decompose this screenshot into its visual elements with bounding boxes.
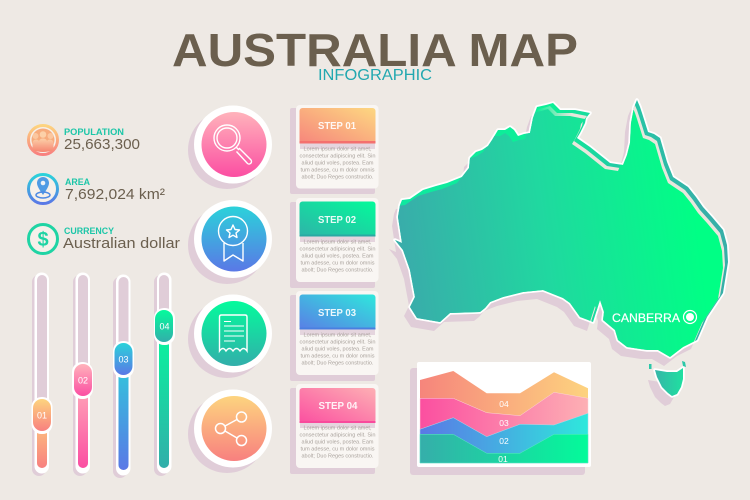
body text: Lorem ipsum dolor sit amet,: [304, 146, 372, 152]
body text: consectetur adipiscing elit. Sin: [300, 340, 376, 346]
step heading: STEP 01: [318, 121, 356, 132]
card: step 01: [290, 105, 378, 194]
body text: abolt; Duo Reges constructio.: [302, 360, 374, 366]
map of Australia: [389, 100, 728, 406]
series labels: 01: [498, 454, 508, 464]
slider value: 02: [78, 376, 88, 386]
title: AUSTRALIA MAP: [172, 24, 578, 76]
card: step 03: [290, 291, 378, 381]
slider 02: [72, 272, 93, 476]
body text: abolt; Duo Reges constructio.: [302, 454, 374, 460]
series labels: [498, 399, 509, 464]
series labels: 03: [499, 418, 509, 428]
icon: dollar: [28, 224, 58, 254]
card: step 02: [290, 198, 378, 288]
series 04: [420, 371, 588, 463]
capital label: CANBERRA: [612, 311, 680, 325]
slider 04: [154, 272, 175, 476]
stat: currency: [28, 224, 180, 254]
slider value: 01: [37, 410, 47, 420]
body text: tum adesse, cu m dolor omnis: [300, 260, 375, 266]
body text: tum adesse, cu m dolor omnis: [300, 354, 375, 360]
circle: share: [188, 390, 272, 473]
label: CURRENCY: [64, 226, 114, 236]
card: step 04: [290, 384, 378, 474]
body text: consectetur adipiscing elit. Sin: [300, 432, 376, 438]
slider 01: [32, 272, 52, 476]
small islands: [649, 361, 686, 369]
body text: abolt; Duo Reges constructio.: [302, 174, 374, 180]
icon: location pin: [28, 174, 58, 204]
body text: consectetur adipiscing elit. Sin: [300, 246, 376, 252]
body text: consectetur adipiscing elit. Sin: [300, 154, 376, 160]
series 02: [420, 413, 588, 463]
body text: tum adesse, cu m dolor omnis: [300, 168, 375, 174]
circle: award: [188, 200, 272, 284]
circle: search: [188, 106, 272, 189]
circle: document: [188, 294, 272, 378]
step heading: STEP 03: [318, 308, 356, 319]
body text: [300, 332, 376, 366]
slider 03: [113, 274, 134, 478]
body text: aliud quid voles, postea. Eam: [302, 440, 374, 446]
body text: [300, 426, 376, 460]
step heading: STEP 02: [318, 215, 356, 226]
stat: area: [28, 174, 165, 204]
series 03: [420, 392, 588, 463]
icon: people: [28, 126, 58, 154]
icon: receipt: [220, 315, 247, 351]
icon: dollar: $: [37, 229, 49, 251]
slider value: 03: [118, 354, 129, 364]
body text: [300, 146, 376, 180]
subtitle: INFOGRAPHIC: [318, 67, 432, 84]
Tasmania: [648, 368, 683, 406]
body text: Lorem ipsum dolor sit amet,: [304, 240, 372, 246]
body text: abolt; Duo Reges constructio.: [302, 268, 374, 274]
icon: ribbon medal: [218, 216, 248, 261]
area chart panel: [410, 362, 591, 475]
slider value: 04: [159, 322, 170, 332]
icon: share nodes: [216, 412, 246, 446]
body text: Lorem ipsum dolor sit amet,: [304, 426, 372, 432]
body text: Lorem ipsum dolor sit amet,: [304, 332, 372, 338]
series labels: 02: [499, 436, 509, 446]
stat: population: [28, 126, 140, 154]
value: 25,663,300: [64, 136, 140, 153]
body text: aliud quid voles, postea. Eam: [302, 160, 374, 166]
body text: tum adesse, cu m dolor omnis: [300, 446, 375, 452]
body text: [300, 240, 376, 274]
value: Australian dollar: [63, 235, 180, 252]
body text: aliud quid voles, postea. Eam: [302, 254, 374, 260]
label: AREA: [65, 177, 90, 187]
label: POPULATION: [64, 127, 124, 137]
body text: aliud quid voles, postea. Eam: [302, 346, 374, 352]
series 01: [420, 434, 588, 463]
value: 7,692,024 km²: [65, 186, 165, 203]
icon: magnifier: [214, 125, 252, 164]
series labels: 04: [499, 399, 509, 409]
step heading: STEP 04: [318, 401, 358, 412]
